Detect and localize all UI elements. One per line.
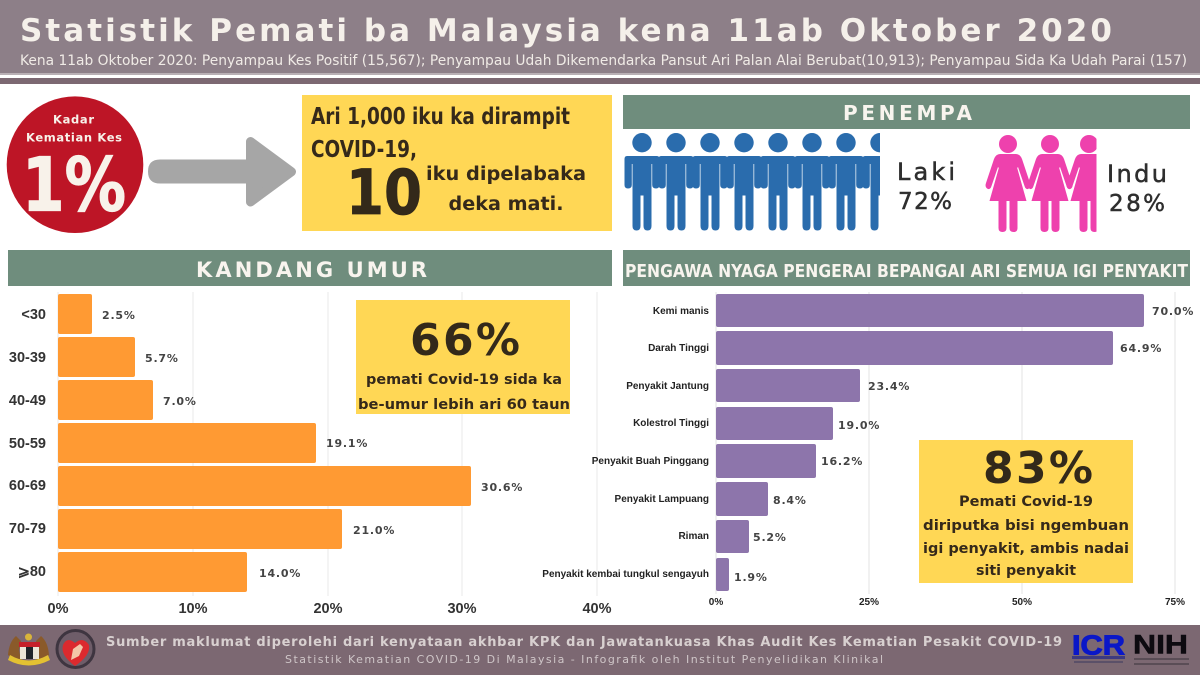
- callout: 83%: [919, 440, 1133, 583]
- arrow: [148, 142, 292, 202]
- bar chart: comorbidities: 16.2%: [821, 455, 863, 468]
- bar chart: comorbidities: Penyakit Lampuang: [615, 494, 709, 505]
- panel: gender: [623, 95, 1190, 232]
- gender heading: PENEMPA: [843, 101, 973, 125]
- bar chart: age group: 40%: [582, 601, 612, 617]
- bar chart: comorbidities: 25%: [859, 597, 879, 608]
- heading: age group: [8, 250, 612, 286]
- bar chart: age group: ⩾80: [18, 564, 46, 580]
- footer: [0, 625, 1200, 675]
- logo: NIH: NIH: [1133, 630, 1188, 660]
- icon: coat of arms: [8, 634, 50, 666]
- bar chart: age group: 60-69: [9, 478, 46, 494]
- callout: 66%: pemati Covid-19 sida ka: [366, 372, 562, 388]
- bar chart: comorbidities: 0%: [709, 597, 723, 608]
- red circle: fatality rate: [7, 96, 143, 233]
- bar chart: age group: 30%: [447, 601, 477, 617]
- bar chart: comorbidities: 70.0%: [1152, 305, 1194, 318]
- bar chart: age group: 19.1%: [326, 437, 368, 450]
- callout: 83%: igi penyakit, ambis nadai: [923, 541, 1129, 557]
- bar chart: comorbidities: 23.4%: [868, 380, 910, 393]
- bar chart: age group: [9, 292, 612, 617]
- bar chart: comorbidities: 19.0%: [838, 419, 880, 432]
- icon: women pictogram: [986, 135, 1096, 232]
- bar chart: comorbidities: Penyakit Jantung: [626, 381, 709, 392]
- callout: 83%: 83%: [983, 443, 1093, 494]
- bar chart: comorbidities: 1.9%: [734, 571, 768, 584]
- bar chart: age group: 2.5%: [102, 309, 136, 322]
- male share: 72%: [898, 189, 952, 215]
- gender heading: [623, 95, 1190, 129]
- bar chart: age group: 21.0%: [353, 524, 395, 537]
- source line: Sumber maklumat diperolehi dari kenyataan akhbar KPK dan Jawatankuasa Khas Audit Kes Kematian Pesakit COVID-19: [106, 635, 1062, 650]
- bar chart: comorbidities: 8.4%: [773, 494, 807, 507]
- arrow head: [250, 142, 292, 202]
- male share: Laki: [897, 158, 955, 186]
- yellow callout: 1 in 1000: 10: [346, 156, 422, 229]
- subtitle: Kena 11ab Oktober 2020: Penyampau Kes Positif (15,567); Penyampau Udah Dikemendarka Pansut Ari Palan Alai Berubat(10,913); Penyampau Sida Ka Udah Parai (157): [20, 53, 1187, 69]
- female share: [1107, 160, 1167, 217]
- bar chart: age group: 40-49: [9, 393, 46, 409]
- bar chart: comorbidities: Kemi manis: [653, 306, 709, 317]
- bar chart: age group: 20%: [313, 601, 343, 617]
- heading: comorbidities: [623, 250, 1190, 286]
- bar chart: comorbidities: 50%: [1012, 597, 1032, 608]
- icon: men pictogram: [624, 133, 898, 230]
- bar chart: comorbidities: 64.9%: [1120, 342, 1162, 355]
- yellow callout: 1 in 1000: iku dipelabaka: [426, 164, 586, 185]
- bar chart: comorbidities: Kolestrol Tinggi: [633, 418, 709, 429]
- icon: heart seal: [57, 630, 94, 668]
- yellow callout: 1 in 1000: [302, 95, 612, 231]
- bar chart: comorbidities: Penyakit Buah Pinggang: [592, 456, 709, 467]
- credit line: Statistik Kematian COVID-19 Di Malaysia - Infografik oleh Institut Penyelidikan Klinikal: [285, 653, 883, 666]
- bar chart: age group: <30: [21, 307, 46, 323]
- female share: Indu: [1107, 160, 1167, 188]
- bar chart: age group: 0%: [48, 601, 69, 617]
- bar chart: comorbidities: [542, 292, 1194, 608]
- yellow callout: 1 in 1000: Ari 1,000 iku ka dirampit: [311, 104, 570, 130]
- male share: [897, 158, 955, 215]
- bar chart: age group: 5.7%: [145, 352, 179, 365]
- bar chart: age group: 14.0%: [259, 567, 301, 580]
- heading: age group: KANDANG UMUR: [196, 258, 427, 282]
- female share: 28%: [1109, 191, 1165, 217]
- bar chart: comorbidities: Darah Tinggi: [648, 343, 709, 354]
- bar chart: age group: 10%: [178, 601, 208, 617]
- bar chart: comorbidities: Penyakit kembai tungkul sengayuh: [542, 569, 709, 580]
- yellow callout: 1 in 1000: deka mati.: [448, 194, 564, 215]
- bar chart: comorbidities: Riman: [678, 531, 709, 542]
- bar chart: age group: 7.0%: [163, 395, 197, 408]
- callout: 83%: diriputka bisi ngembuan: [923, 518, 1129, 534]
- red circle: fatality rate: Kematian Kes: [26, 130, 122, 144]
- title: Statistik Pemati ba Malaysia kena 11ab Oktober 2020: [20, 13, 1112, 49]
- bar chart: age group: 70-79: [9, 521, 46, 537]
- callout: 83%: Pemati Covid-19: [959, 494, 1093, 510]
- callout: 66%: [356, 300, 570, 414]
- bar chart: age group: 30.6%: [481, 481, 523, 494]
- yellow callout: 1 in 1000: COVID-19,: [311, 137, 417, 163]
- header banner: [0, 0, 1200, 84]
- bar chart: comorbidities: 75%: [1165, 597, 1185, 608]
- bar chart: age group: 50-59: [9, 436, 46, 452]
- callout: 66%: 66%: [410, 315, 520, 366]
- callout: 83%: siti penyakit: [976, 563, 1076, 579]
- bar chart: age group: 30-39: [9, 350, 46, 366]
- logo: ICR: ICR: [1072, 630, 1125, 660]
- callout: 66%: be-umur lebih ari 60 taun: [358, 397, 570, 413]
- red circle: fatality rate: 1%: [22, 142, 126, 228]
- red circle: fatality rate: Kadar: [53, 112, 94, 126]
- bar chart: comorbidities: 5.2%: [753, 531, 787, 544]
